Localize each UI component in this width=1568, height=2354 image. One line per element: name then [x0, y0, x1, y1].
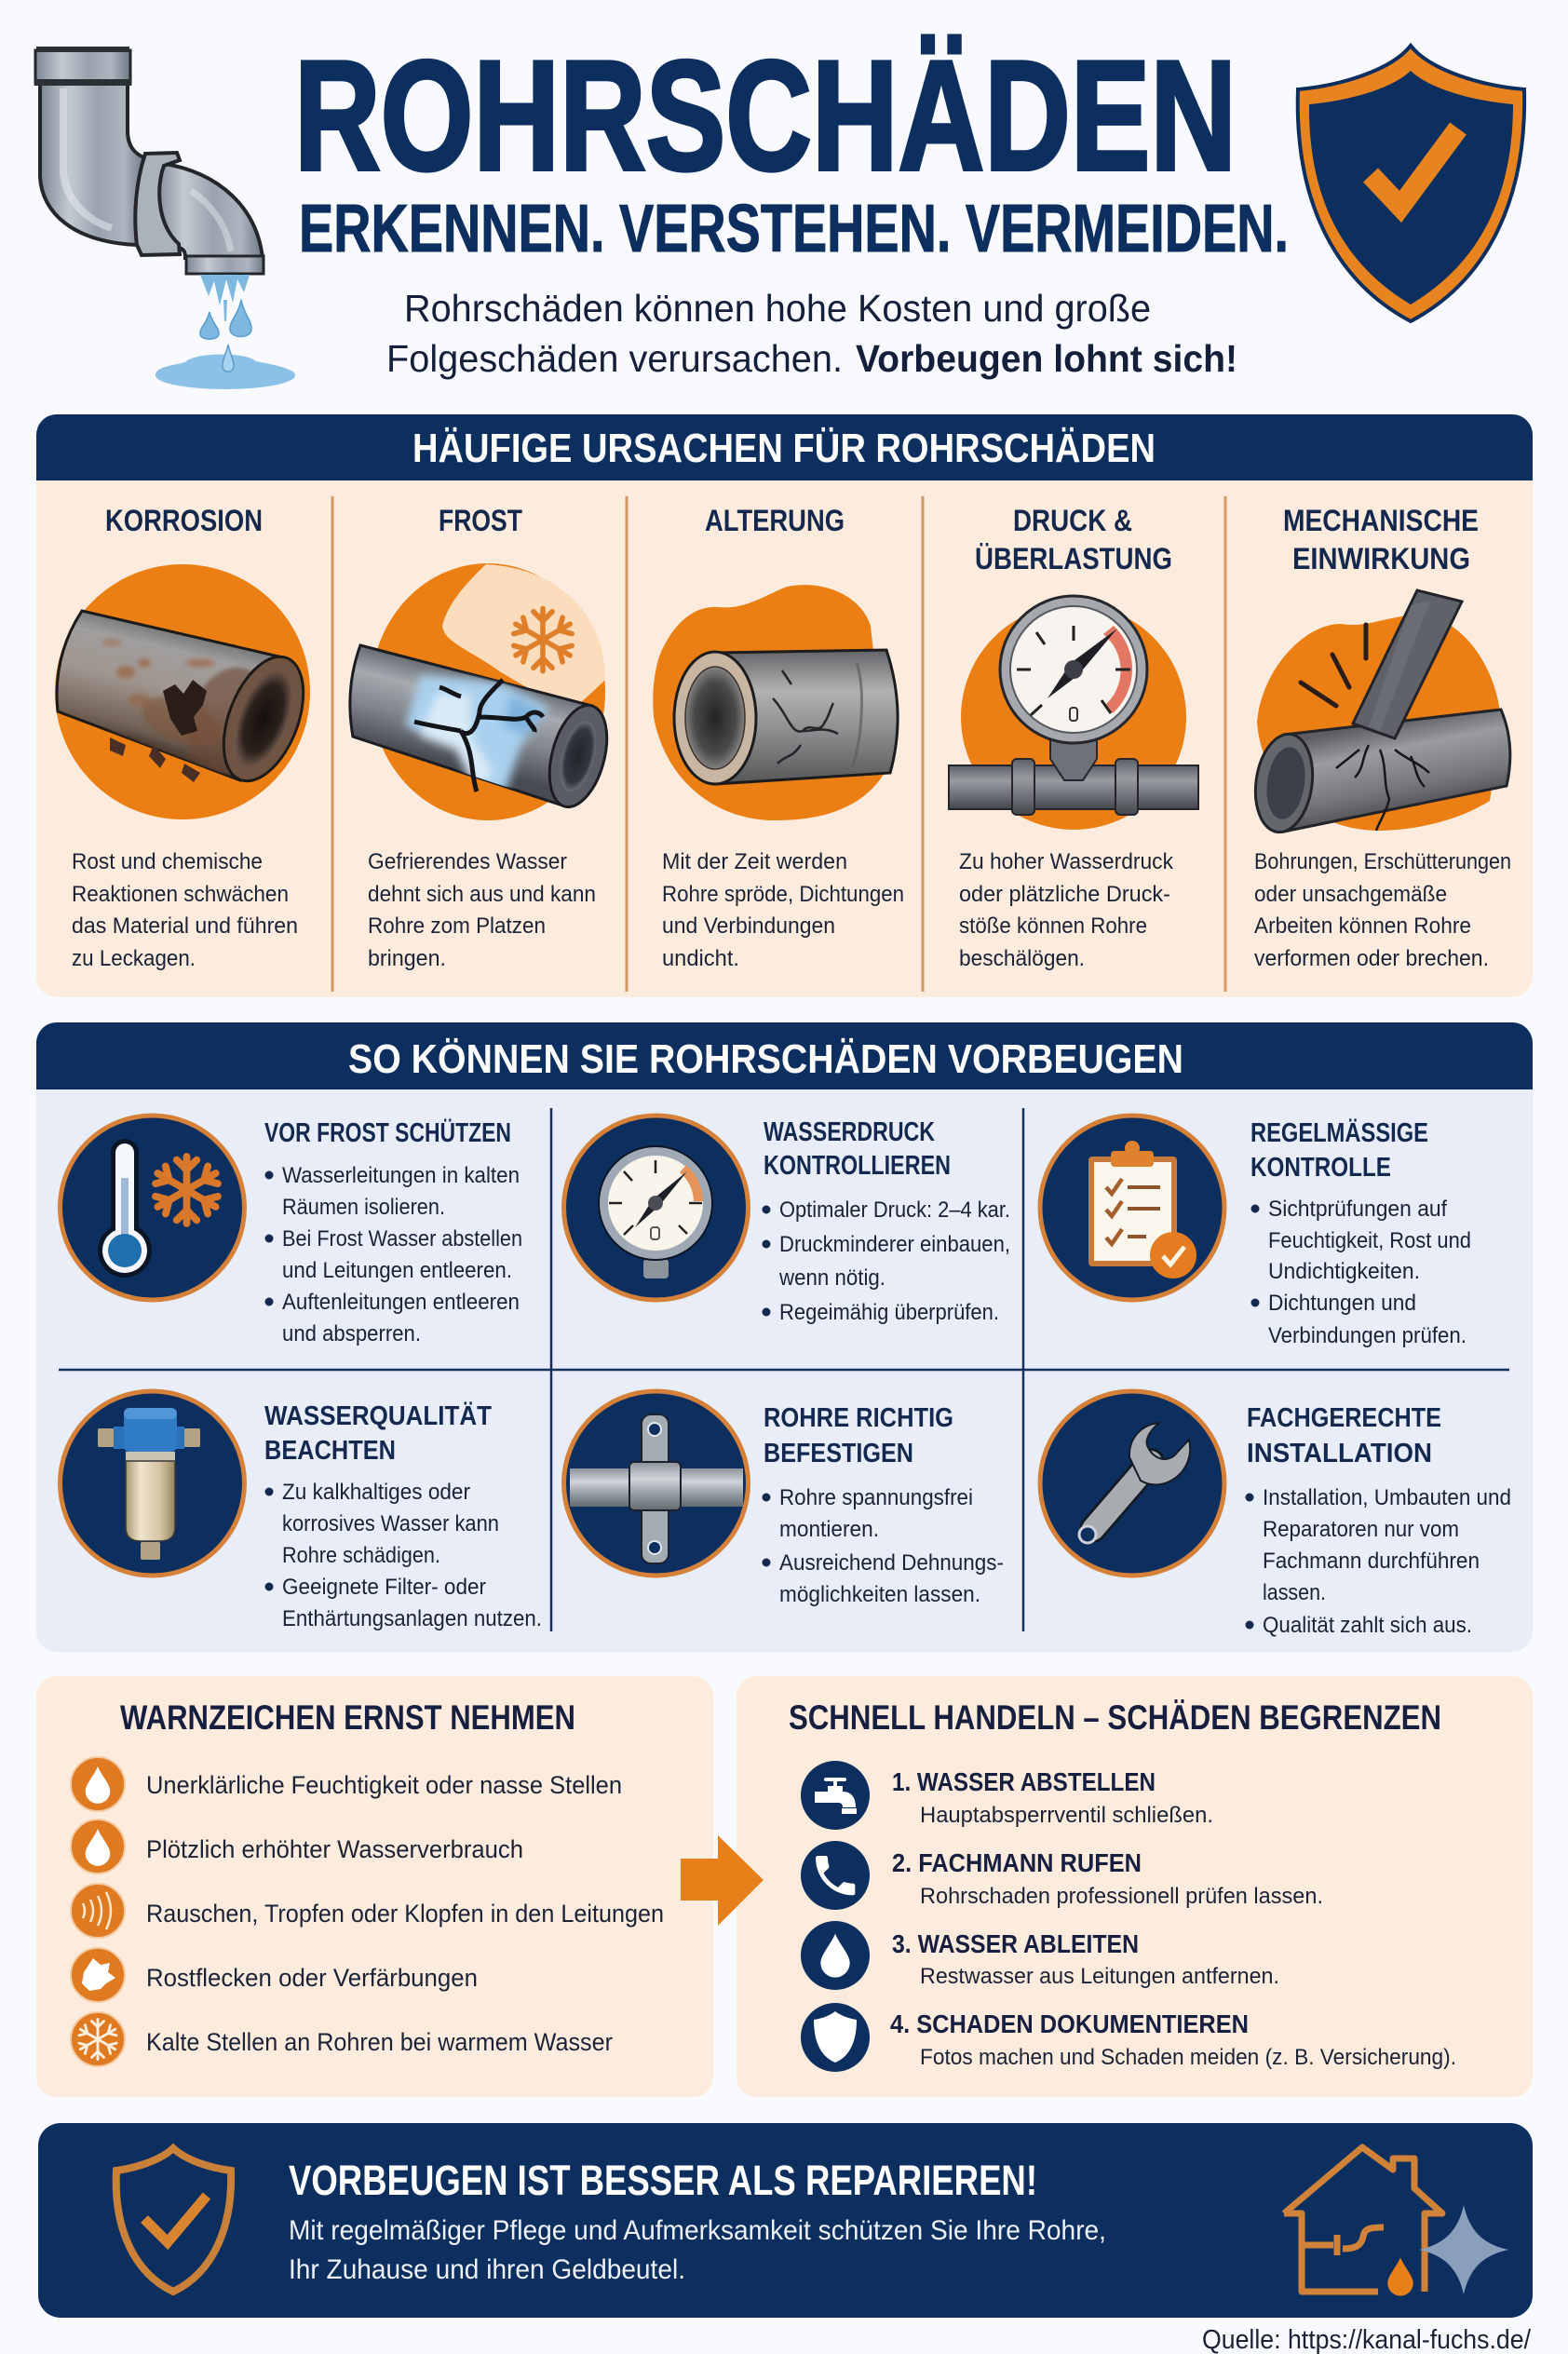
bullet list: Fachgerechte Installation: Fachmann durchführen — [1263, 1549, 1480, 1574]
heading: Alterung: ALTERUNG — [705, 504, 845, 537]
description: Korrosion: das Material und führen — [72, 913, 298, 939]
bullet list: Rohre richtig befestigen: montieren. — [779, 1517, 879, 1542]
bullet list: Vor Frost schützen: und absperren. — [282, 1321, 421, 1346]
bullet list: Fachgerechte Installation: lassen. — [1263, 1580, 1326, 1605]
description: Frost: Gefrierendes Wasser — [368, 849, 567, 874]
description: Druck: beschälögen. — [959, 946, 1085, 971]
step 4 — [801, 2003, 1456, 2072]
heading: Fachgerechte Installation: FACHGERECHTE — [1247, 1403, 1441, 1433]
tip: Wasserdruck kontrollieren — [564, 1116, 1010, 1325]
heading: Wasserqualität beachten: BEACHTEN — [264, 1436, 396, 1466]
column: Druck — [949, 504, 1198, 971]
intro text: Folgeschäden verursachen. — [386, 337, 843, 380]
description: Mechanische Einwirkung: Bohrungen, Erschütterungen — [1254, 849, 1511, 874]
column: Alterung — [653, 504, 904, 971]
bullet list: Rohre richtig befestigen: Ausreichend Dehnungs- — [779, 1550, 1004, 1576]
bullet list: Vor Frost schützen: Bei Frost Wasser abstellen — [282, 1226, 522, 1251]
bullet list: Fachgerechte Installation: Installation, Umbauten und — [1263, 1485, 1511, 1510]
description: Mechanische Einwirkung — [1254, 849, 1511, 971]
description: Druck: oder plätzliche Druck- — [959, 882, 1170, 907]
description: Korrosion: zu Leckagen. — [72, 946, 196, 971]
icon: pressure gauge on pipe — [949, 596, 1198, 830]
bullet list: Wasserqualität beachten: korrosives Wasser kann — [282, 1511, 499, 1536]
panel: warning signs — [36, 1676, 713, 2097]
icon: pressure gauge — [564, 1116, 749, 1300]
warning item: noises: Rauschen, Tropfen oder Klopfen in den Leitungen — [146, 1900, 664, 1928]
banner text: Mit regelmäßiger Pflege und Aufmerksamkeit schützen Sie Ihre Rohre, — [289, 2215, 1106, 2246]
step 1: Hauptabsperrventil schließen. — [920, 1803, 1213, 1828]
bullet list: Rohre richtig befestigen — [762, 1485, 1004, 1607]
description: Druck: Zu hoher Wasserdruck — [959, 849, 1174, 874]
heading: Rohre richtig befestigen — [764, 1403, 953, 1468]
heading: Rohre richtig befestigen: ROHRE RICHTIG — [764, 1403, 953, 1433]
banner: prevention message — [38, 2123, 1533, 2318]
intro text — [386, 287, 1237, 380]
description: Korrosion — [72, 849, 298, 971]
bullet list: Vor Frost schützen: und Leitungen entleeren. — [282, 1258, 512, 1283]
step 4: 4. SCHADEN DOKUMENTIEREN — [890, 2009, 1249, 2038]
heading: Regelmäßige Kontrolle: REGELMÄSSIGE — [1250, 1117, 1428, 1148]
description: Frost — [368, 849, 596, 971]
heading: Mechanische Einwirkung — [1283, 504, 1479, 575]
description: Alterung: undicht. — [662, 946, 739, 971]
icon: water filter — [60, 1391, 244, 1576]
warning item: moisture — [71, 1757, 622, 1811]
column: Korrosion — [55, 504, 319, 971]
description: Frost: bringen. — [368, 946, 446, 971]
bullet list: Wasserqualität beachten: Zu kalkhaltiges oder — [282, 1480, 470, 1505]
step 2: 2. FACHMANN RUFEN — [892, 1848, 1142, 1877]
bullet list: Regelmäßige Kontrolle — [1251, 1197, 1471, 1348]
panel: causes — [36, 414, 1533, 997]
bullet list: Wasserdruck kontrollieren: wenn nötig. — [778, 1265, 885, 1291]
description: Alterung: Rohre spröde, Dichtungen — [662, 882, 904, 907]
step 1: 1. WASSER ABSTELLEN — [892, 1767, 1156, 1796]
icon: frost-cracked pipe — [350, 563, 617, 820]
bullet list: Rohre richtig befestigen: möglichkeiten lassen. — [779, 1582, 980, 1607]
bullet list: Regelmäßige Kontrolle: Verbindungen prüfen. — [1268, 1323, 1467, 1348]
icon: pipe clamp — [564, 1391, 749, 1576]
description: Mechanische Einwirkung: Arbeiten können Rohre — [1254, 913, 1471, 939]
bullet list: Fachgerechte Installation: Reparatoren nur vom — [1263, 1517, 1459, 1542]
header bar: causes — [36, 414, 1533, 480]
step 2 — [801, 1841, 1323, 1910]
heading: Wasserdruck kontrollieren: KONTROLLIEREN — [764, 1151, 951, 1181]
tip: Fachgerechte Installation — [1040, 1391, 1511, 1638]
panel: prevention — [36, 1022, 1533, 1652]
description: Alterung: Mit der Zeit werden — [662, 849, 847, 874]
heading: Mechanische Einwirkung: EINWIRKUNG — [1292, 542, 1470, 575]
heading: Vor Frost schützen: VOR FROST SCHÜTZEN — [264, 1117, 511, 1148]
step 3 — [801, 1921, 1279, 1990]
icon: thermometer and snowflake — [60, 1116, 244, 1300]
icon: pipe struck by rod — [1250, 590, 1510, 836]
bullet list: Wasserqualität beachten — [264, 1480, 542, 1631]
tip: Regelmäßige Kontrolle — [1040, 1116, 1471, 1348]
icon: clipboard checklist — [1040, 1116, 1224, 1300]
description: Druck: stöße können Rohre — [959, 913, 1147, 939]
column: Mechanische Einwirkung — [1250, 504, 1511, 971]
intro text: Vorbeugen lohnt sich! — [856, 337, 1237, 380]
icon: shield outline with check — [116, 2148, 231, 2292]
warning item: noises — [71, 1884, 664, 1938]
bullet list: Rohre richtig befestigen: Rohre spannungsfrei — [779, 1485, 973, 1510]
banner heading: VORBEUGEN IST BESSER ALS REPARIEREN! — [289, 2157, 1037, 2204]
bullet list: Regelmäßige Kontrolle: Feuchtigkeit, Rost und — [1268, 1228, 1471, 1253]
warning item: water consumption — [71, 1820, 523, 1874]
header bar: prevention — [36, 1022, 1533, 1089]
heading: Wasserqualität beachten — [264, 1400, 492, 1466]
description: Korrosion: Reaktionen schwächen — [72, 882, 289, 907]
bullet list: Fachgerechte Installation: Qualität zahlt sich aus. — [1263, 1613, 1472, 1638]
heading: Fachgerechte Installation — [1247, 1403, 1441, 1468]
warning item: rust stains: Rostflecken oder Verfärbungen — [146, 1964, 478, 1992]
heading: Regelmäßige Kontrolle: KONTROLLE — [1250, 1153, 1391, 1183]
title: ROHRSCHÄDEN — [294, 28, 1237, 203]
heading: Fachgerechte Installation: INSTALLATION — [1247, 1439, 1432, 1468]
description: Druck — [959, 849, 1174, 971]
bullet list: Wasserdruck kontrollieren: Regeimähig überprüfen. — [779, 1300, 999, 1325]
header — [34, 28, 1524, 389]
description: Frost: Rohre zom Platzen — [368, 913, 546, 939]
bullet list: Wasserqualität beachten: Geeignete Filter- oder — [282, 1575, 486, 1600]
icon: house with pipe and drop — [1284, 2147, 1442, 2296]
heading: act quickly: SCHNELL HANDELN – SCHÄDEN BEGRENZEN — [789, 1698, 1441, 1737]
icon: leaking pipe — [34, 47, 295, 389]
arrow — [681, 1835, 764, 1926]
heading: Druck und Überlastung: DRUCK & — [1013, 504, 1132, 537]
icon: aged pipe — [653, 585, 898, 820]
bullet list: Wasserdruck kontrollieren: Optimaler Druck: 2–4 kar. — [779, 1197, 1010, 1223]
heading: Korrosion: KORROSION — [105, 504, 263, 537]
bullet list: Vor Frost schützen: Auftenleitungen entleeren — [282, 1290, 520, 1315]
banner text — [289, 2215, 1106, 2285]
bullet list: Wasserqualität beachten: Rohre schädigen. — [282, 1543, 440, 1568]
step 1 — [801, 1761, 1213, 1830]
icon: wrench — [1040, 1391, 1224, 1576]
step 3: 3. WASSER ABLEITEN — [892, 1929, 1139, 1958]
description: Frost: dehnt sich aus und kann — [368, 882, 596, 907]
heading: Regelmäßige Kontrolle — [1250, 1117, 1428, 1183]
bullet list: Regelmäßige Kontrolle: Dichtungen und — [1268, 1291, 1416, 1316]
column: Frost — [350, 504, 617, 971]
header bar: prevention: SO KÖNNEN SIE ROHRSCHÄDEN VORBEUGEN — [348, 1036, 1183, 1082]
warning item: cold spots: Kalte Stellen an Rohren bei warmem Wasser — [146, 2028, 613, 2056]
heading: Wasserdruck kontrollieren: WASSERDRUCK — [764, 1117, 935, 1147]
bullet list: Fachgerechte Installation — [1246, 1485, 1511, 1638]
step 2: Rohrschaden professionell prüfen lassen. — [920, 1884, 1323, 1909]
icon: snowflake — [511, 608, 574, 671]
tip: Vor Frost schützen — [60, 1116, 522, 1346]
bullet list: Regelmäßige Kontrolle: Sichtprüfungen auf — [1268, 1197, 1447, 1222]
description: Mechanische Einwirkung: verformen oder brechen. — [1254, 946, 1489, 971]
step 4: Fotos machen und Schaden meiden (z. B. Versicherung). — [920, 2045, 1456, 2070]
heading: Rohre richtig befestigen: BEFESTIGEN — [764, 1439, 913, 1468]
description: Alterung — [662, 849, 904, 971]
banner text: Ihr Zuhause und ihren Geldbeutel. — [289, 2254, 685, 2285]
decorative star — [1419, 2205, 1508, 2294]
icon: corroded pipe — [55, 564, 319, 819]
warning item: cold spots — [71, 2012, 613, 2066]
description: Alterung: und Verbindungen — [662, 913, 835, 939]
step 3: Restwasser aus Leitungen antfernen. — [920, 1964, 1279, 1989]
heading: warning signs: WARNZEICHEN ERNST NEHMEN — [120, 1698, 575, 1737]
bullet list: Vor Frost schützen: Wasserleitungen in kalten — [282, 1163, 520, 1188]
bullet list: Vor Frost schützen: Räumen isolieren. — [282, 1195, 445, 1220]
description: Mechanische Einwirkung: oder unsachgemäße — [1254, 882, 1447, 907]
warning item: moisture: Unerklärliche Feuchtigkeit oder nasse Stellen — [146, 1771, 622, 1799]
header bar: causes: HÄUFIGE URSACHEN FÜR ROHRSCHÄDEN — [412, 426, 1156, 471]
warning item: water consumption: Plötzlich erhöhter Wasserverbrauch — [146, 1835, 523, 1863]
tip: Rohre richtig befestigen — [564, 1391, 1004, 1607]
subtitle: ERKENNEN. VERSTEHEN. VERMEIDEN. — [299, 192, 1289, 266]
heading: Druck und Überlastung — [975, 504, 1172, 575]
heading: Mechanische Einwirkung: MECHANISCHE — [1283, 504, 1479, 537]
bullet list: Wasserdruck kontrollieren: Druckminderer einbauen, — [779, 1232, 1010, 1257]
heading: Wasserdruck kontrollieren — [764, 1117, 951, 1181]
intro text: Rohrschäden können hohe Kosten und große — [404, 287, 1151, 330]
heading: Wasserqualität beachten: WASSERQUALITÄT — [264, 1400, 492, 1431]
icon: shield with checkmark — [1298, 46, 1524, 321]
bullet list: Regelmäßige Kontrolle: Undichtigkeiten. — [1268, 1259, 1420, 1284]
bullet list: Wasserdruck kontrollieren — [762, 1197, 1010, 1325]
panel: act quickly — [737, 1676, 1533, 2097]
heading: Frost: FROST — [439, 504, 522, 537]
bullet list: Vor Frost schützen — [264, 1163, 522, 1346]
description: Korrosion: Rost und chemische — [72, 849, 263, 874]
bullet list: Wasserqualität beachten: Enthärtungsanlagen nutzen. — [282, 1606, 542, 1631]
tip: Wasserqualität beachten — [60, 1391, 542, 1631]
heading: Druck und Überlastung: ÜBERLASTUNG — [975, 542, 1172, 575]
warning item: rust stains — [71, 1948, 478, 2002]
